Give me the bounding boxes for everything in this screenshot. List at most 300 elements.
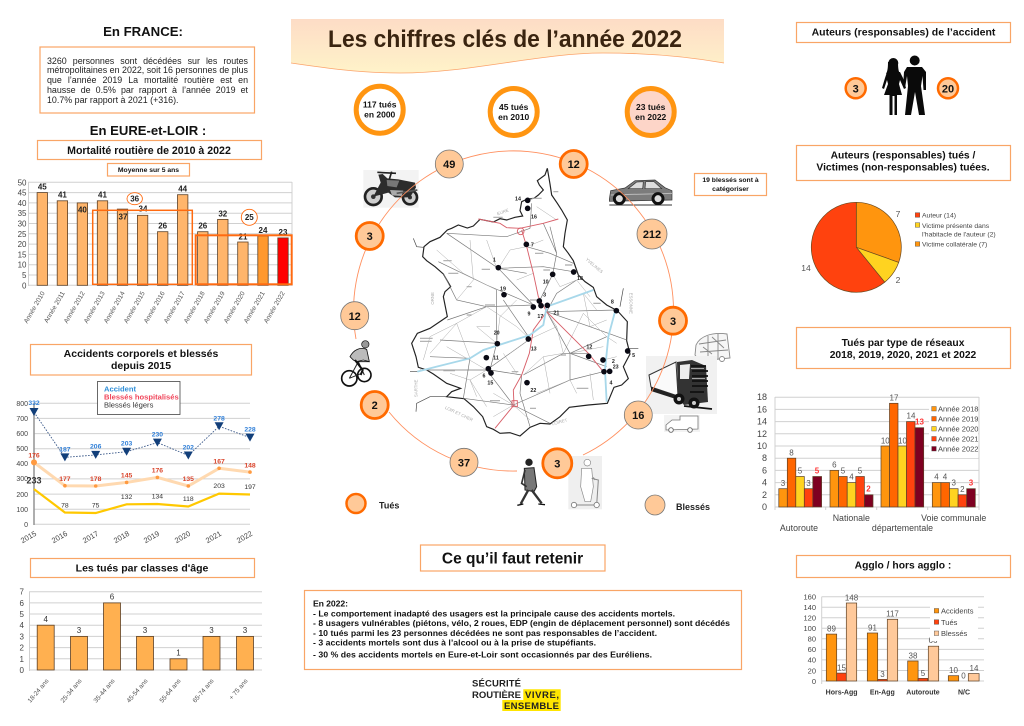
line chart: accidents et blessés: 177 bbox=[59, 476, 71, 483]
panel: En 2022 bbox=[304, 590, 742, 670]
number circle: piétons tués 3: 3 bbox=[554, 458, 560, 470]
bar chart: tués par classes d'âge: 35-44 ans bbox=[93, 677, 117, 704]
accident numbers: 21 bbox=[553, 310, 559, 316]
icon: car bbox=[609, 180, 672, 205]
bar chart: tués par type de réseaux: 6 bbox=[832, 460, 837, 470]
bar chart: tués par classes d'âge: 6 bbox=[110, 592, 115, 602]
number circle: motos blessés 49 bbox=[435, 150, 463, 178]
number circle: voitures blessés 212: 212 bbox=[643, 229, 661, 241]
pie chart: auteurs et victimes: 2 bbox=[896, 275, 901, 285]
bar chart: tués par type de réseaux: 3 bbox=[969, 478, 974, 488]
title banner: Les chiffres clés de l’année 2022 bbox=[328, 26, 682, 53]
number circle: vélos tués 2: 2 bbox=[372, 400, 378, 412]
accident numbers: 18 bbox=[577, 276, 583, 282]
pie chart: auteurs et victimes: 14 bbox=[801, 263, 811, 273]
bar chart: tués par type de réseaux: 16 bbox=[757, 404, 767, 414]
number circle: 20 auteurs: 20 bbox=[942, 83, 954, 95]
bar chart: mortalité routière 2010-2022: Année 2014 bbox=[103, 290, 127, 325]
bar chart: mortalité routière 2010-2022: Année 2016 bbox=[143, 290, 167, 325]
accident numbers: 4 bbox=[610, 380, 613, 386]
number circle: motos tués 3: 3 bbox=[367, 231, 373, 243]
text block: France: 10.7% par rapport à 2021 (+316). bbox=[47, 94, 178, 104]
line chart: accidents et blessés: 145 bbox=[121, 472, 132, 480]
number circle: vélos blessés 12: 12 bbox=[349, 311, 361, 323]
heading: Tués par type de réseaux: 2018, 2019, 2020, 2021 et 2022 bbox=[830, 350, 977, 361]
number circle: poids lourds tués 3 bbox=[660, 307, 686, 334]
legend: années: Année 2018 bbox=[938, 404, 978, 414]
number circle: motos blessés 49: 49 bbox=[443, 159, 455, 171]
bar chart: tués par type de réseaux: 10 bbox=[881, 436, 890, 446]
line chart: accidents et blessés: 233 bbox=[26, 476, 42, 486]
accident numbers: 12 bbox=[586, 345, 592, 351]
bar chart: tués par type de réseaux: 5 bbox=[841, 466, 846, 476]
icon: van bbox=[664, 415, 700, 432]
accident numbers: 5 bbox=[632, 353, 635, 359]
line chart: accidents et blessés: 176 bbox=[152, 468, 163, 474]
pie legend bbox=[915, 212, 996, 248]
heading: En EURE-et-LOIR: En EURE-et-LOIR : bbox=[90, 123, 206, 138]
bar chart: tués par type de réseaux: 2 bbox=[866, 484, 871, 494]
line chart: accidents et blessés: 167 bbox=[213, 458, 225, 466]
bar chart: agglo / hors agglo: N/C bbox=[958, 690, 970, 696]
bar chart: tués par type de réseaux: 4 bbox=[849, 472, 854, 482]
logo: Sécurité routière: ENSEMBLE bbox=[504, 701, 559, 712]
number circle: poids lourds blessés 16: 16 bbox=[632, 410, 644, 422]
number circle: 20 auteurs bbox=[938, 78, 958, 98]
bar chart: mortalité routière 2010-2022: 41 bbox=[58, 190, 67, 200]
bar chart: tués par type de réseaux: Nationale bbox=[833, 513, 870, 523]
logo: Sécurité routière bbox=[472, 678, 561, 712]
stat circle: 117 tués en 2000: en 2000 bbox=[364, 110, 396, 120]
number circle: piétons blessés 37: 37 bbox=[458, 458, 470, 470]
logo: Sécurité routière: VIVRE, bbox=[525, 690, 559, 701]
heading: Ce qu'il faut retenir bbox=[420, 545, 605, 571]
bar chart: agglo / hors agglo: 0 bbox=[812, 677, 816, 686]
bar chart: agglo / hors agglo: 66 bbox=[929, 636, 938, 645]
legend: accidents, tués, blessés bbox=[930, 603, 978, 641]
bar chart: mortalité routière 2010-2022: 26 bbox=[158, 222, 168, 230]
number circle: voitures blessés 212 bbox=[637, 219, 667, 249]
bar chart: mortalité routière 2010-2022: 45 bbox=[18, 189, 27, 198]
stat circle: 23 tués en 2022 bbox=[627, 88, 674, 136]
bar chart: tués par classes d'âge: 25-34 ans bbox=[60, 677, 84, 704]
bar chart: mortalité routière 2010-2022: Année 2021 bbox=[243, 290, 267, 325]
stat circle: 23 tués en 2022: en 2022 bbox=[635, 112, 667, 122]
line chart: accidents et blessés: 2015 bbox=[19, 529, 38, 545]
bar chart: agglo / hors agglo: 117 bbox=[886, 610, 899, 618]
bar chart: mortalité routière 2010-2022: 40 bbox=[78, 206, 87, 214]
callout: 19 blessés à catégoriser bbox=[694, 174, 766, 196]
bar chart: mortalité routière 2010-2022: 10 bbox=[18, 261, 27, 270]
map blue motorways bbox=[417, 290, 615, 402]
icon: scooter rider bbox=[568, 456, 602, 509]
line chart: accidents et blessés: 2017 bbox=[81, 529, 100, 545]
heading: Accidents corporels et blessés: depuis 2015 bbox=[111, 360, 171, 372]
legend: années: Année 2022 bbox=[938, 444, 978, 454]
bar chart: mortalité routière 2010-2022: 35 bbox=[18, 209, 27, 218]
number circle: piétons tués 3 bbox=[543, 449, 572, 478]
bar chart: mortalité routière 2010-2022: 24 bbox=[259, 226, 268, 235]
bar chart: tués par type de réseaux: 13 bbox=[915, 418, 924, 426]
map place-name marks bbox=[420, 192, 601, 408]
accident numbers: 14 bbox=[515, 196, 521, 202]
neighbouring department names: EURE bbox=[496, 207, 509, 216]
number circle: piétons blessés 37 bbox=[450, 448, 478, 476]
bar chart: mortalité routière 2010-2022: 5 bbox=[22, 271, 27, 280]
bar chart: mortalité routière 2010-2022: 34 bbox=[139, 204, 148, 214]
heading: Accidents corporels et blessés: Accidents corporels et blessés bbox=[64, 348, 218, 360]
heading: Tués par type de réseaux: Tués par type de réseaux bbox=[842, 338, 965, 349]
bar chart: mortalité routière 2010-2022: 25 bbox=[18, 230, 27, 239]
heading: Accidents corporels et blessés bbox=[30, 344, 252, 375]
line chart: accidents et blessés: 278 bbox=[213, 416, 225, 422]
bar chart: mortalité routière 2010-2022 bbox=[18, 178, 292, 325]
accident numbers: 3 bbox=[543, 292, 546, 298]
line chart: accidents et blessés: 176 bbox=[28, 452, 40, 460]
bar chart: agglo / hors agglo: 120 bbox=[803, 614, 816, 622]
accident dots bbox=[483, 197, 630, 385]
line chart: accidents et blessés: 187 bbox=[59, 446, 71, 454]
bar chart: tués par type de réseaux: départementale bbox=[872, 523, 933, 533]
heading: Tués par type de réseaux bbox=[796, 328, 1010, 368]
ring around the map bbox=[354, 151, 674, 471]
line chart: accidents et blessés: 2018 bbox=[112, 529, 131, 545]
line chart: accidents et blessés: 0 bbox=[24, 522, 28, 529]
accident numbers: 16 bbox=[531, 215, 537, 221]
pie legend: Auteur (14) bbox=[922, 212, 956, 220]
bar chart: tués par classes d'âge: 3 bbox=[209, 626, 214, 635]
bar chart: tués par type de réseaux: 4 bbox=[762, 478, 767, 488]
logo: Sécurité routière: SÉCURITÉ bbox=[472, 678, 521, 690]
legend: accidents, tués, blessés: Blessés bbox=[941, 629, 968, 638]
panel: France text box bbox=[40, 47, 254, 113]
bar chart: agglo / hors agglo: 60 bbox=[808, 645, 816, 654]
bar chart: mortalité routière 2010-2022: 45 bbox=[38, 182, 47, 192]
legend: line chart: Accident bbox=[104, 384, 137, 394]
heading: Agglo / hors agglo: Agglo / hors agglo : bbox=[855, 560, 951, 572]
bar chart: mortalité routière 2010-2022: 37 bbox=[119, 212, 128, 222]
stat circle: 117 tués en 2000 bbox=[356, 86, 403, 133]
bar chart: tués par type de réseaux: 12 bbox=[757, 429, 767, 439]
neighbouring department names bbox=[413, 207, 633, 426]
bar chart: tués par type de réseaux bbox=[757, 392, 986, 533]
bar chart: mortalité routière 2010-2022: Année 2019 bbox=[203, 290, 227, 325]
line chart: accidents et blessés: 2016 bbox=[50, 529, 69, 545]
line chart: accidents et blessés: 400 bbox=[16, 461, 28, 468]
icon: pedestrian bbox=[517, 459, 545, 505]
bar chart: mortalité routière 2010-2022: 15 bbox=[18, 250, 27, 259]
line chart: accidents et blessés: 300 bbox=[16, 476, 28, 483]
bar chart: mortalité routière 2010-2022: Année 2022 bbox=[263, 290, 287, 325]
bar chart: tués par classes d'âge: 7 bbox=[20, 588, 25, 597]
stat circle: 23 tués en 2022: 23 tués bbox=[636, 102, 666, 112]
line chart: accidents et blessés: 332 bbox=[28, 400, 40, 407]
accident numbers: 8 bbox=[611, 299, 614, 305]
bar chart: mortalité routière 2010-2022: 25 bbox=[245, 213, 254, 222]
line chart: accidents et blessés: 100 bbox=[16, 507, 28, 514]
logo: Sécurité routière: ROUTIÈRE bbox=[472, 690, 521, 701]
bar chart: tués par type de réseaux: 4 bbox=[934, 472, 939, 482]
bar chart: mortalité routière 2010-2022: 36 bbox=[130, 194, 140, 204]
line chart: accidents et blessés: 178 bbox=[90, 476, 102, 483]
heading: Auteurs tués / Victimes tuées: Auteurs (responsables) tués / bbox=[831, 150, 976, 162]
accident numbers: 2 bbox=[612, 359, 615, 365]
bar chart: agglo / hors agglo bbox=[803, 592, 984, 696]
bar chart: agglo / hors agglo: Autoroute bbox=[906, 690, 940, 696]
title banner bbox=[291, 19, 724, 73]
bar chart: tués par classes d'âge: 2 bbox=[20, 644, 25, 653]
stat circle: 117 tués en 2000: 117 tués bbox=[363, 100, 397, 110]
label: Moyenne sur 5 ans: Moyenne sur 5 ans bbox=[118, 167, 179, 174]
bar chart: mortalité routière 2010-2022: 32 bbox=[218, 210, 228, 218]
heading: Auteurs tués / Victimes tuées: Victimes (non-responsables) tuées. bbox=[816, 162, 990, 174]
line chart: accidents et blessés: 2019 bbox=[142, 529, 161, 545]
bar chart: mortalité routière 2010-2022: Année 2018 bbox=[183, 290, 207, 325]
bar chart: mortalité routière 2010-2022: Année 2012 bbox=[63, 290, 87, 325]
bar chart: tués par classes d'âge: 3 bbox=[77, 626, 82, 635]
heading: Auteurs (responsables) de l'accident: Auteurs (responsables) de l’accident bbox=[812, 26, 996, 38]
heading: Auteurs tués / Victimes tuées bbox=[796, 146, 1010, 180]
bar chart: mortalité routière 2010-2022: Année 2017 bbox=[163, 290, 187, 325]
line chart: accidents et blessés: 230 bbox=[152, 432, 163, 438]
label: Moyenne sur 5 ans bbox=[108, 164, 190, 176]
line chart: accidents et blessés: 600 bbox=[16, 431, 28, 438]
bar chart: tués par type de réseaux: 2 bbox=[960, 485, 965, 494]
bar chart: agglo / hors agglo: 20 bbox=[808, 666, 816, 675]
accident numbers: 13 bbox=[531, 346, 537, 352]
bar chart: mortalité routière 2010-2022: 30 bbox=[18, 220, 27, 228]
bar chart: agglo / hors agglo: 148 bbox=[845, 594, 859, 602]
number circle: vélos blessés 12 bbox=[341, 302, 369, 330]
accident numbers: 11 bbox=[493, 355, 499, 361]
neighbouring department names: LOIR ET CHER bbox=[444, 405, 474, 422]
legend: line chart bbox=[98, 382, 180, 414]
map outline bbox=[412, 168, 630, 436]
bar chart: tués par classes d'âge: 4 bbox=[43, 615, 48, 624]
number circle: motos tués 3 bbox=[356, 222, 383, 250]
legend: années: Année 2021 bbox=[938, 434, 978, 444]
text block: France: 3260 personnes sont décédées sur les routes bbox=[47, 56, 248, 66]
accident numbers: 19 bbox=[500, 286, 506, 292]
bar chart: tués par classes d'âge: 6 bbox=[20, 599, 25, 608]
neighbouring department names: ORNE bbox=[430, 292, 435, 305]
bar chart: mortalité routière 2010-2022: 23 bbox=[279, 228, 288, 237]
bar chart: tués par classes d'âge: 18-24 ans bbox=[27, 677, 51, 704]
pie chart: auteurs et victimes: 7 bbox=[896, 209, 901, 219]
map road network bbox=[420, 203, 627, 427]
pie legend: Victime présente dans bbox=[922, 223, 990, 230]
line chart: accidents et blessés: 197 bbox=[244, 484, 256, 491]
neighbouring department names: ESSONNE bbox=[628, 293, 633, 314]
accident numbers: 7 bbox=[531, 242, 534, 248]
bar chart: agglo / hors agglo: 100 bbox=[803, 624, 816, 633]
bar chart: tués par classes d'âge: 0 bbox=[20, 666, 25, 675]
bar chart: mortalité routière 2010-2022: Année 2020 bbox=[223, 290, 247, 325]
accident numbers bbox=[483, 196, 635, 394]
number circle: 3 auteurs: 3 bbox=[853, 83, 859, 95]
line chart: accidents et blessés: 228 bbox=[244, 426, 256, 434]
pie legend: l'habitacle de l'auteur (2) bbox=[922, 232, 996, 238]
bar chart: tués par classes d'âge: 1 bbox=[20, 655, 25, 664]
bar chart: tués par classes d'âge: 4 bbox=[20, 621, 25, 630]
bar chart: mortalité routière 2010-2022: 26 bbox=[198, 222, 208, 230]
bar chart: agglo / hors agglo: 160 bbox=[803, 592, 816, 602]
bar chart: mortalité routière 2010-2022: 44 bbox=[178, 184, 188, 194]
heading: Agglo / hors agglo bbox=[796, 556, 1010, 578]
callout: 19 blessés à catégoriser: catégoriser bbox=[712, 186, 749, 193]
line chart: accidents et blessés: 800 bbox=[16, 401, 28, 408]
line chart: accidents et blessés: 75 bbox=[92, 502, 100, 510]
accident numbers: 6 bbox=[483, 374, 486, 380]
map: Eure-et-Loir bbox=[410, 168, 638, 436]
line chart: accidents et blessés: 135 bbox=[183, 476, 194, 483]
pie legend: Victime collatérale (7) bbox=[922, 242, 987, 248]
bar chart: tués par type de réseaux: 4 bbox=[943, 472, 948, 482]
heading: Mortalité routière: Mortalité routière de 2010 à 2022 bbox=[67, 145, 231, 157]
neighbouring department names: SARTHE bbox=[413, 379, 418, 397]
stat circle: 45 tués en 2010: 45 tués bbox=[499, 102, 529, 112]
bar chart: mortalité routière 2010-2022: Année 2011 bbox=[43, 290, 67, 324]
legend: accidents, tués, blessés: Tués bbox=[941, 618, 958, 627]
accident numbers: 20 bbox=[494, 331, 500, 337]
bar chart: tués par classes d'âge: 45-54 ans bbox=[126, 677, 150, 704]
accident numbers: 23 bbox=[613, 365, 619, 371]
bar chart: tués par type de réseaux: 14 bbox=[907, 412, 916, 420]
bar chart: agglo / hors agglo: 3 bbox=[880, 670, 885, 679]
heading: Les tués par classes d'âge bbox=[30, 558, 254, 578]
legend: accidents, tués, blessés: Accidents bbox=[941, 606, 974, 616]
callout: 19 blessés à catégoriser: 19 blessés sont à bbox=[702, 177, 759, 184]
bar chart: tués par classes d'âge: 55-64 ans bbox=[159, 677, 183, 704]
neighbouring department names: YVELINES bbox=[585, 257, 604, 274]
panel: En 2022: - 10 tués parmi les 23 personnes décédées ne sont pas responsables de l’accident. bbox=[313, 628, 657, 638]
bar chart: tués par type de réseaux: 10 bbox=[898, 436, 907, 446]
map outer rivers and neighbouring departments bbox=[410, 168, 638, 412]
line chart: accidents et blessés: 203 bbox=[121, 440, 132, 448]
bar chart: tués par classes d'âge: 3 bbox=[143, 626, 148, 635]
bar chart: tués par type de réseaux: 5 bbox=[858, 466, 863, 476]
bar chart: agglo / hors agglo: 38 bbox=[909, 652, 918, 660]
panel: En 2022: - 3 accidents mortels sont dus à l’alcool ou à la prise de stupéfiants. bbox=[313, 638, 596, 648]
line chart: accidents et blessés: 78 bbox=[61, 502, 69, 510]
line chart: accidents et blessés: 500 bbox=[16, 446, 28, 453]
bar chart: agglo / hors agglo: 89 bbox=[827, 624, 836, 634]
legend: line chart: Blessés hospitalisés bbox=[104, 392, 179, 402]
bar chart: agglo / hors agglo: 80 bbox=[808, 634, 816, 644]
bar chart: tués par type de réseaux: 17 bbox=[890, 394, 899, 402]
bar chart: tués par type de réseaux: 18 bbox=[757, 392, 767, 402]
bar chart: agglo / hors agglo: 140 bbox=[803, 603, 816, 612]
bar chart: tués par type de réseaux: Autoroute bbox=[780, 523, 818, 533]
number circle: voitures tués 12 bbox=[560, 150, 587, 178]
bar chart: mortalité routière 2010-2022: 0 bbox=[22, 281, 27, 290]
icon: motorcycle bbox=[363, 170, 419, 208]
bar chart: tués par type de réseaux: 14 bbox=[757, 417, 767, 427]
bar chart: tués par type de réseaux: 10 bbox=[757, 441, 767, 451]
legend: années: Année 2019 bbox=[938, 414, 978, 424]
accident numbers: 9 bbox=[528, 311, 531, 317]
bar chart: mortalité routière 2010-2022: 40 bbox=[18, 199, 27, 208]
bar chart: tués par type de réseaux: 5 bbox=[798, 466, 803, 476]
accident numbers: 15 bbox=[487, 381, 493, 387]
number circle: vélos tués 2 bbox=[361, 392, 388, 418]
heading: Ce qu'il faut retenir: Ce qu’il faut retenir bbox=[442, 550, 583, 568]
stat circle: 45 tués en 2010: en 2010 bbox=[498, 112, 530, 122]
accident numbers: 17 bbox=[537, 314, 543, 320]
bar chart: agglo / hors agglo: En-Agg bbox=[870, 690, 895, 696]
legend: Blessés: Blessés bbox=[676, 502, 710, 512]
bar chart: agglo / hors agglo: 15 bbox=[837, 664, 846, 672]
number circle: poids lourds tués 3: 3 bbox=[670, 316, 676, 328]
accident numbers: 1 bbox=[493, 257, 496, 263]
legend: Blessés bbox=[645, 495, 710, 515]
bar chart: mortalité routière 2010-2022: 20 bbox=[18, 240, 27, 249]
icon: cyclist bbox=[342, 341, 371, 386]
bar chart: mortalité routière 2010-2022: 21 bbox=[239, 232, 248, 242]
line chart: accidents et blessés: 132 bbox=[121, 494, 132, 501]
line chart: accidents et blessés: 203 bbox=[213, 483, 225, 490]
icon: woman and man silhouettes bbox=[882, 56, 926, 115]
bar chart: agglo / hors agglo: 0 bbox=[961, 672, 966, 680]
number circle: poids lourds blessés 16 bbox=[624, 401, 652, 429]
bar chart: tués par type de réseaux: 3 bbox=[781, 479, 786, 488]
bar chart: tués par classes d'âge: 3 bbox=[20, 632, 25, 641]
line chart: accidents et blessés: 700 bbox=[16, 416, 28, 423]
stat circle: 45 tués en 2010 bbox=[490, 88, 537, 136]
line chart: accidents et blessés: 2021 bbox=[204, 529, 223, 545]
bar chart: mortalité routière 2010-2022: Année 2010 bbox=[23, 290, 47, 325]
line chart: accidents et blessés bbox=[16, 382, 256, 545]
heading: Mortalité routière bbox=[38, 140, 262, 160]
bar chart: tués par type de réseaux: 0 bbox=[762, 502, 767, 512]
bar chart: agglo / hors agglo: 91 bbox=[868, 624, 877, 632]
bar chart: agglo / hors agglo: 14 bbox=[970, 664, 979, 673]
text block: France: que l’année 2019 La mortalité routière est en bbox=[47, 75, 248, 85]
bar chart: tués par classes d'âge bbox=[20, 588, 262, 704]
text block: France: métropolitaines en 2022, soit 16 personnes de plus bbox=[47, 65, 248, 75]
legend: Tués: Tués bbox=[379, 500, 399, 510]
legend: line chart: Blessés légers bbox=[104, 400, 154, 410]
icon: truck bbox=[646, 356, 717, 414]
bar chart: mortalité routière 2010-2022: 41 bbox=[98, 190, 107, 200]
line chart: accidents et blessés: 202 bbox=[183, 444, 194, 452]
bar chart: tués par type de réseaux: 8 bbox=[762, 453, 767, 463]
accident numbers: 22 bbox=[530, 388, 536, 394]
map secondary roads bbox=[423, 207, 617, 420]
bar chart: tués par classes d'âge: 5 bbox=[20, 610, 25, 619]
bar chart: tués par type de réseaux: 3 bbox=[806, 479, 811, 488]
bar chart: tués par type de réseaux: 5 bbox=[815, 466, 820, 476]
heading: Auteurs (responsables) de l'accident bbox=[796, 22, 1010, 42]
accident numbers: 10 bbox=[543, 279, 549, 285]
bar chart: tués par type de réseaux: 2 bbox=[762, 490, 767, 500]
bar chart: agglo / hors agglo: 40 bbox=[808, 656, 816, 665]
map red roads bbox=[478, 219, 603, 428]
text block: France bbox=[47, 56, 248, 105]
bar chart: tués par type de réseaux: Voie communale bbox=[921, 513, 986, 523]
panel: En 2022: En 2022: bbox=[313, 598, 348, 608]
heading: En FRANCE: En FRANCE: bbox=[103, 24, 183, 39]
bar chart: tués par classes d'âge: + 75 ans bbox=[228, 677, 250, 702]
bar chart: mortalité routière 2010-2022: Année 2013 bbox=[83, 290, 107, 325]
number circle: voitures tués 12: 12 bbox=[568, 159, 580, 171]
bar chart: agglo / hors agglo: 5 bbox=[921, 669, 926, 678]
line chart: accidents et blessés: 2022 bbox=[235, 529, 254, 545]
bar chart: mortalité routière 2010-2022: 50 bbox=[18, 178, 27, 187]
number circle: 3 auteurs bbox=[846, 78, 866, 98]
bar chart: tués par type de réseaux: 8 bbox=[789, 448, 794, 458]
line chart: accidents et blessés: 206 bbox=[90, 444, 102, 450]
